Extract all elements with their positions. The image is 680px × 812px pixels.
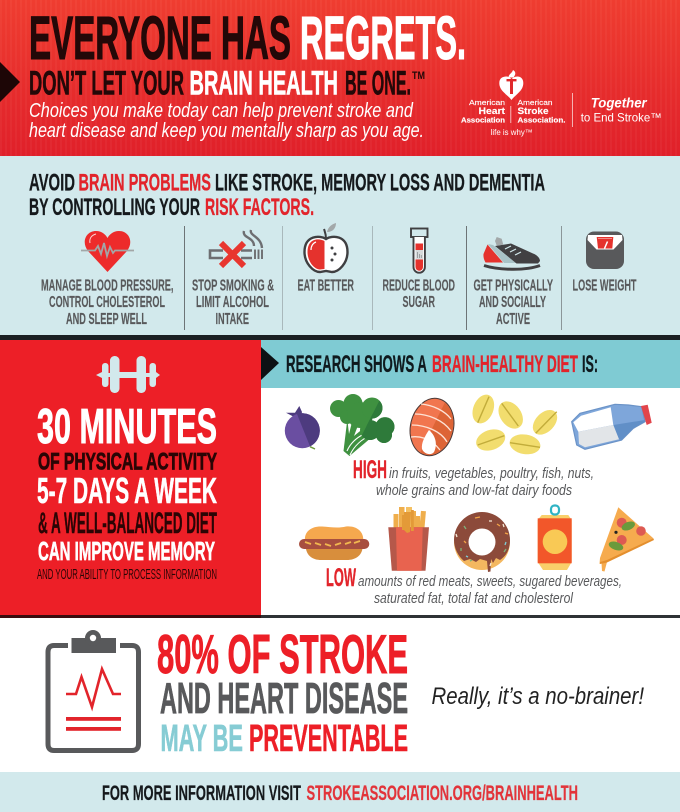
text block: low in: LOW <box>326 564 356 592</box>
text block: intro sentence: Choices you make today can help prevent stroke and <box>29 100 414 122</box>
subtitle: brain health: BRAIN HEALTH <box>190 64 338 102</box>
label: eat better: EAT BETTER <box>298 278 354 294</box>
icon: apple <box>304 223 348 272</box>
heading: research shows: RESEARCH SHOWS A <box>286 351 427 378</box>
icon: pizza slice <box>600 507 654 572</box>
logo: american heart and stroke association: American <box>518 98 552 107</box>
logo: american heart and stroke association: life is why™ <box>491 128 533 137</box>
heading: avoid brain problems: RISK FACTORS. <box>205 194 314 221</box>
icon: oats <box>468 391 562 456</box>
panel: header banner <box>0 0 680 156</box>
text block: thirty minutes: CAN IMPROVE MEMORY <box>38 536 215 566</box>
heading: avoid brain problems <box>29 170 545 221</box>
label: stop smoking <box>192 278 274 328</box>
text block: high in: in fruits, vegetables, poultry, fish, nuts, <box>389 465 594 482</box>
icon: hot dog <box>299 526 369 560</box>
panel: footer <box>0 772 680 812</box>
icon: clipboard <box>48 630 138 750</box>
label: reduce blood sugar: SUGAR <box>402 294 435 311</box>
label: reduce blood sugar <box>382 278 455 311</box>
text block: high in: whole grains and low-fat dairy foods <box>376 482 572 499</box>
arrow: diet marker <box>261 347 279 380</box>
text block: low in: saturated fat, total fat and cholesterol <box>374 590 574 607</box>
logo: american heart and stroke association: Together <box>591 95 648 111</box>
icon: weight scale <box>586 232 624 269</box>
logo: american heart and stroke association: Association. <box>518 116 566 124</box>
panel: physical activity <box>0 340 261 615</box>
icon: broccoli <box>330 394 394 456</box>
panel: prevention statistic <box>48 623 644 760</box>
text block: thirty minutes: AND YOUR ABILITY TO PROCESS INFORMATION <box>37 567 217 583</box>
logo: american heart and stroke association: American <box>469 98 505 107</box>
icon: no smoking <box>210 230 262 266</box>
heading: avoid brain problems: AVOID <box>29 170 75 196</box>
logo: american heart and stroke association: Stroke <box>518 106 548 117</box>
icon: running shoe <box>483 237 540 269</box>
text block: thirty minutes: 5-7 DAYS A WEEK <box>37 470 217 511</box>
arrow: header marker <box>0 62 20 102</box>
logo: american heart and stroke association: Heart <box>478 106 506 117</box>
text block: 80 percent <box>157 623 408 760</box>
heading: avoid brain problems: BRAIN PROBLEMS <box>78 170 211 196</box>
label: manage blood pressure: AND SLEEP WELL <box>66 311 147 328</box>
text block: low in <box>326 564 622 607</box>
panel: footer: FOR MORE INFORMATION VISIT <box>102 781 301 805</box>
text block: 80 percent: MAY BE <box>160 718 243 760</box>
title: everyone has regrets: EVERYONE HAS <box>29 4 291 72</box>
panel: physical activity: & A WELL-BALANCED DIET <box>38 507 217 540</box>
icon: dumbbell <box>96 356 160 393</box>
panel: risk factors <box>0 156 680 335</box>
heading: research shows: IS: <box>582 351 598 378</box>
icon: test tube <box>411 228 428 273</box>
label: get physically and socially active: AND SOCIALLY <box>479 294 546 311</box>
text block: thirty minutes: 30 MINUTES <box>37 400 217 454</box>
icon: fries <box>388 507 429 571</box>
callout: no-brainer: Really, it’s a no-brainer! <box>432 683 644 710</box>
logo: american heart and stroke association <box>461 70 662 137</box>
label: manage blood pressure: MANAGE BLOOD PRESSURE, <box>41 278 174 294</box>
label: get physically and socially active <box>474 278 553 328</box>
text block: intro sentence <box>29 100 424 142</box>
label: manage blood pressure: CONTROL CHOLESTEROL <box>49 294 165 311</box>
icon: heart with pulse <box>81 231 134 272</box>
icon: donut <box>454 512 510 572</box>
subtitle: brain health: TM <box>412 70 425 82</box>
label: get physically and socially active: ACTIVE <box>496 311 530 328</box>
text block: high in <box>353 456 594 499</box>
logo: american heart and stroke association: to End Stroke™ <box>581 110 662 124</box>
text block: intro sentence: heart disease and keep you mentally sharp as you age. <box>29 120 424 142</box>
label: manage blood pressure <box>41 278 174 328</box>
label: stop smoking: LIMIT ALCOHOL <box>196 294 269 311</box>
text block: thirty minutes <box>37 400 217 583</box>
icon: salmon steak <box>410 398 454 456</box>
text block: high in: HIGH <box>353 456 387 484</box>
panel: brain-healthy diet <box>261 340 680 615</box>
text block: 80 percent: PREVENTABLE <box>249 718 408 760</box>
icon: blueberry <box>285 406 320 449</box>
icon: soda can <box>538 506 572 570</box>
logo: american heart and stroke association: Association <box>461 116 505 124</box>
label: reduce blood sugar: REDUCE BLOOD <box>382 278 455 294</box>
text block: 80 percent: 80% OF STROKE <box>157 623 408 685</box>
heading: avoid brain problems: BY CONTROLLING YOUR <box>29 194 200 221</box>
label: get physically and socially active: GET PHYSICALLY <box>474 278 553 294</box>
label: stop smoking: INTAKE <box>216 311 249 328</box>
label: stop smoking: STOP SMOKING & <box>192 278 274 294</box>
icon: milk bottle <box>572 404 652 449</box>
text block: thirty minutes: OF PHYSICAL ACTIVITY <box>38 448 217 475</box>
subtitle: brain health: BE ONE. <box>345 64 411 102</box>
title: everyone has regrets: REGRETS. <box>300 4 466 72</box>
text block: 80 percent: AND HEART DISEASE <box>160 674 408 723</box>
subtitle: brain health: DON’T LET YOUR <box>29 64 184 102</box>
